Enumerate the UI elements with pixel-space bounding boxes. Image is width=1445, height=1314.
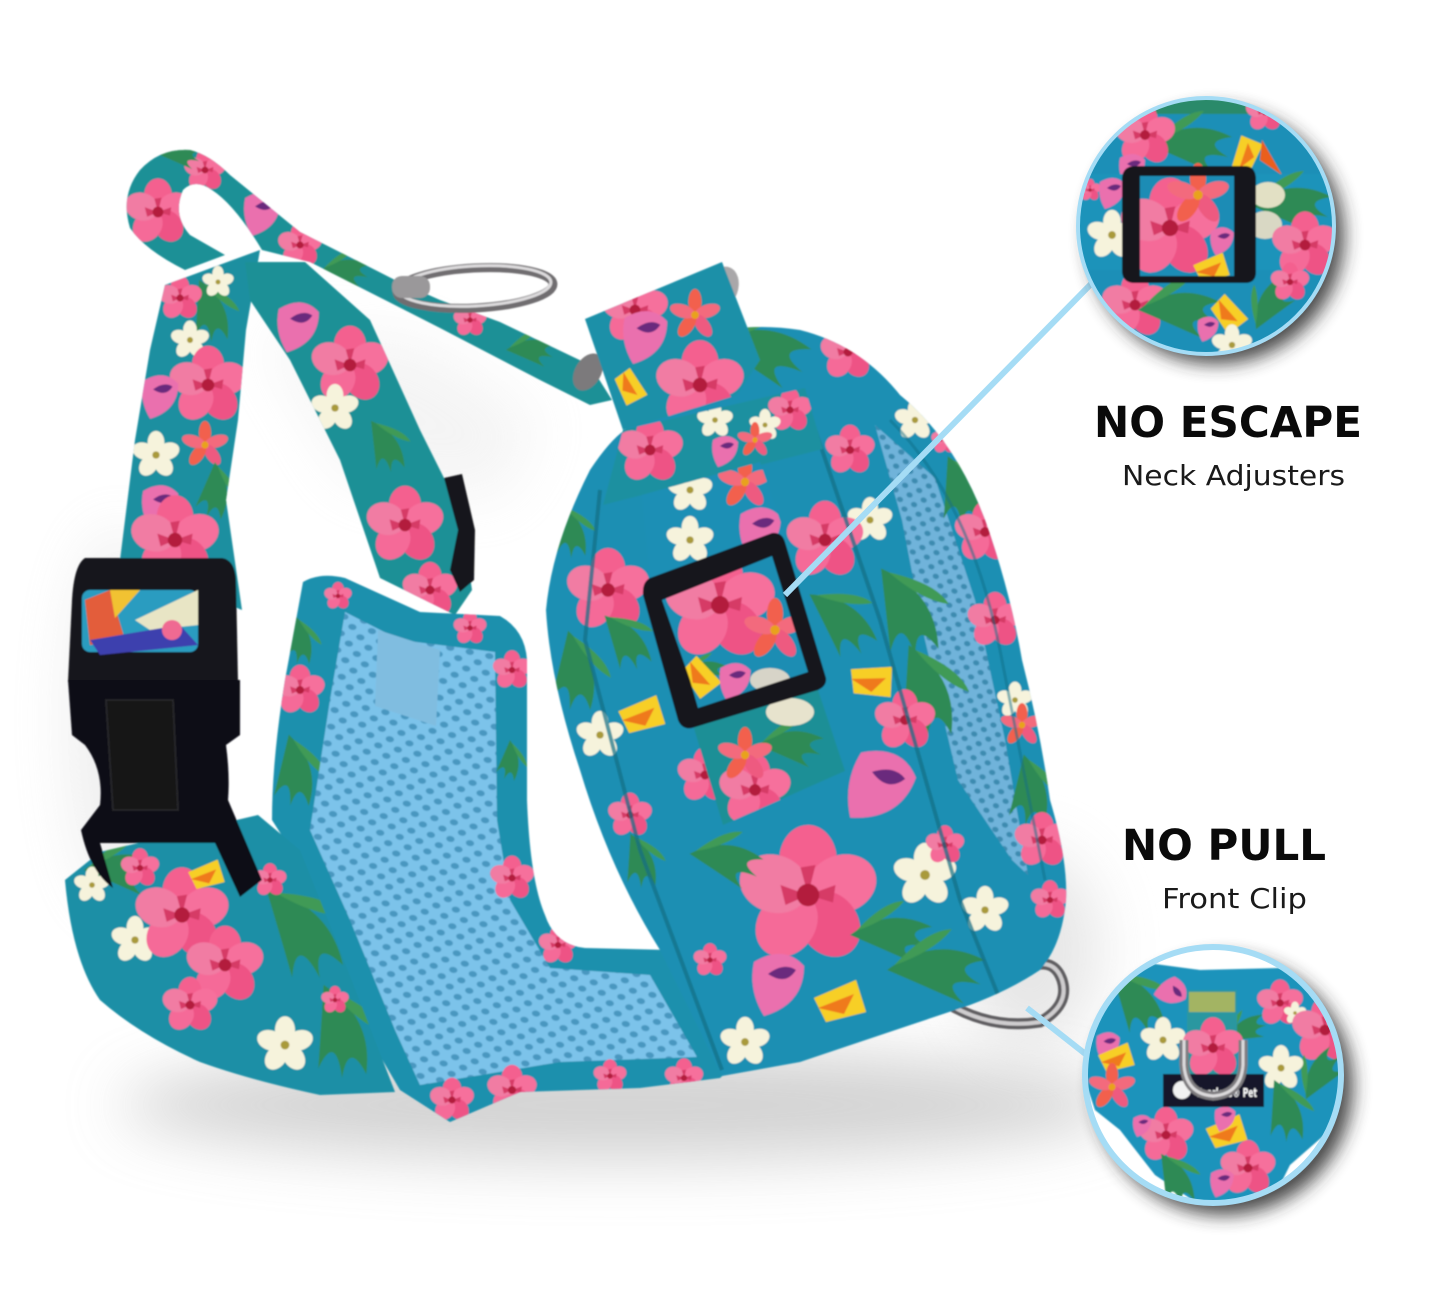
brand label: Fearless® Pet bbox=[1197, 1086, 1257, 1100]
soft drop shadow under harness bbox=[70, 330, 1120, 1160]
brand label bbox=[1163, 1074, 1264, 1107]
left neck strap bbox=[110, 250, 260, 620]
mesh patch bbox=[375, 630, 440, 726]
top loop strap bbox=[126, 148, 613, 406]
harness product illustration bbox=[60, 138, 1080, 1130]
callout text: no pull bbox=[1122, 821, 1326, 915]
zoom circle: neck adjusters bbox=[1070, 90, 1344, 366]
callout line: neck adjusters bbox=[785, 283, 1092, 595]
large back pad bbox=[530, 301, 1080, 1090]
zoom circle: front clip bbox=[1085, 947, 1361, 1215]
body strap rings bbox=[699, 262, 1064, 1024]
callout text: no escape: Neck Adjusters bbox=[1122, 459, 1345, 492]
buckle top with strap window bbox=[68, 558, 238, 682]
callout text: no escape: NO ESCAPE bbox=[1094, 398, 1362, 448]
side mesh lining bbox=[875, 425, 1028, 875]
slider buckle close-up bbox=[1122, 166, 1256, 283]
small strap slider bbox=[444, 474, 475, 592]
chest panel bbox=[270, 574, 723, 1123]
buckle inset panel bbox=[106, 700, 178, 810]
lower strap end bbox=[690, 690, 850, 830]
strap through buckle bbox=[665, 567, 798, 700]
neck adjuster slider buckle bbox=[643, 533, 826, 728]
strap roll in window bbox=[82, 590, 198, 655]
harness chest fabric bbox=[1085, 964, 1345, 1205]
D-ring bbox=[1184, 1040, 1243, 1096]
callout text: no pull: NO PULL bbox=[1122, 821, 1326, 871]
cross band bbox=[604, 388, 823, 504]
lower left pad bbox=[60, 810, 400, 1100]
right neck strap bbox=[240, 255, 480, 625]
metal ring on top strap bbox=[392, 262, 609, 396]
callout line: front clip bbox=[1027, 1008, 1088, 1056]
chest mesh lining bbox=[310, 612, 697, 1085]
top tab of neck strap bbox=[584, 261, 761, 431]
callout text: no pull: Front Clip bbox=[1162, 882, 1307, 915]
buckle body bbox=[68, 680, 262, 897]
side release buckle bbox=[68, 558, 262, 897]
webbing strap bbox=[1187, 990, 1237, 1078]
callout text: no escape bbox=[1094, 398, 1362, 492]
upper strap section bbox=[665, 462, 782, 562]
pad piping seams bbox=[820, 442, 1000, 994]
